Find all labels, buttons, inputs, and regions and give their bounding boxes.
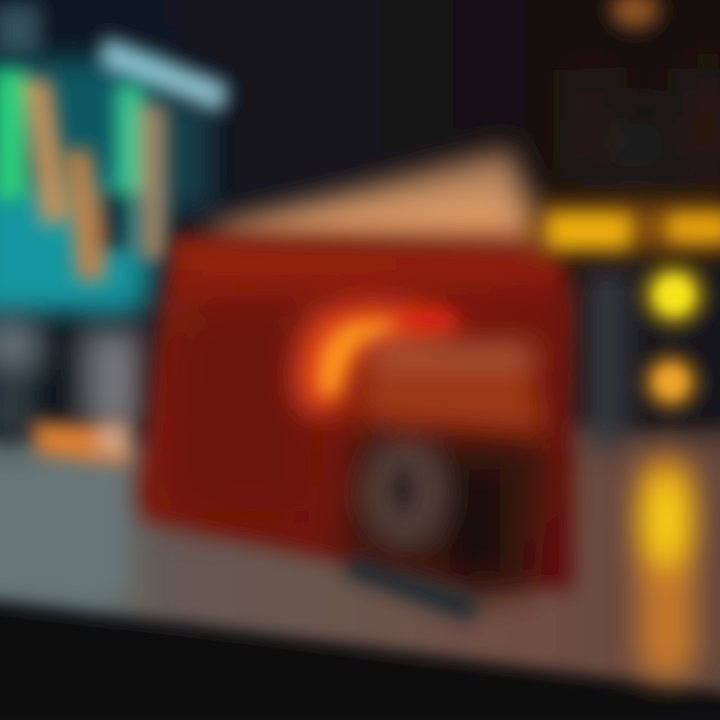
orange round light bbox=[643, 354, 699, 410]
orange base bbox=[30, 422, 130, 465]
wallet bbox=[138, 150, 578, 622]
wallet coin center bbox=[391, 466, 415, 514]
right side lights bbox=[535, 0, 720, 680]
wallet body bbox=[138, 235, 578, 590]
upper orange glow bbox=[611, 0, 659, 28]
chart screen bbox=[0, 5, 228, 465]
green and orange candles bbox=[0, 70, 166, 280]
upper right dark shapes bbox=[575, 70, 720, 180]
chart top bar bbox=[0, 5, 228, 112]
table surface bbox=[0, 420, 720, 700]
wallet flap bbox=[358, 345, 545, 440]
chart base stand bbox=[0, 320, 143, 440]
light reflection on table bbox=[638, 455, 696, 680]
yellow light bar bbox=[535, 205, 720, 250]
dark vertical panel bbox=[585, 260, 720, 450]
wallet clasp dark pocket bbox=[345, 430, 545, 600]
paper notes bbox=[205, 150, 545, 250]
glowing hot spot bbox=[296, 304, 460, 415]
yellow round light bbox=[642, 263, 706, 327]
chart glow panel bbox=[0, 60, 210, 315]
dark foreground edge bbox=[0, 600, 720, 720]
wallet card strip bbox=[345, 555, 480, 622]
